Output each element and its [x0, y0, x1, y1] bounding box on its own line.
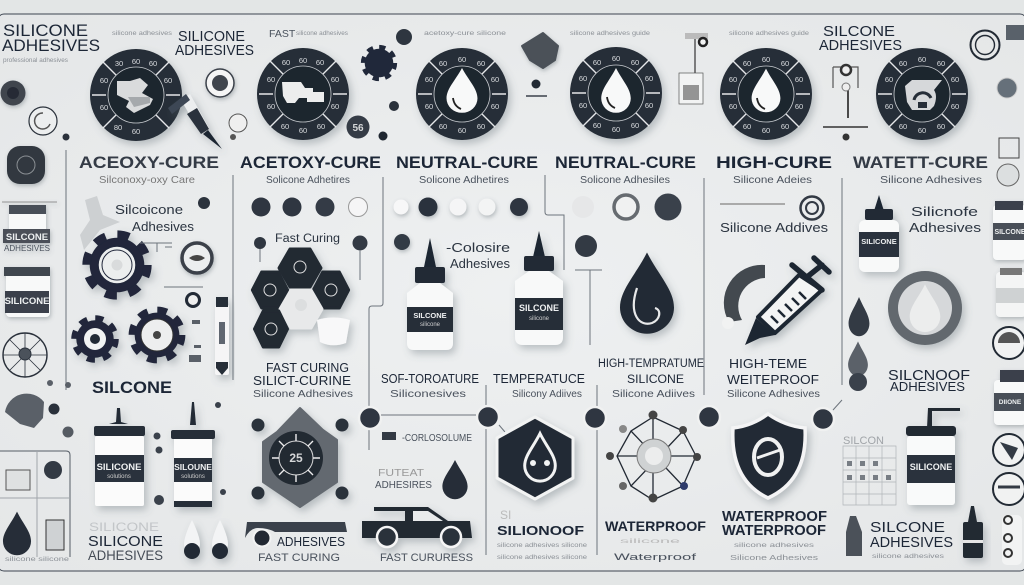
header: silicone adhesives right: SILCONE — [823, 23, 895, 40]
dial: neutral 2: 60 — [631, 121, 639, 130]
dial: high-cure — [720, 48, 812, 140]
icon: link pill — [1002, 515, 1022, 565]
dial: acetoxy 1: 60 — [100, 76, 108, 85]
column subtitles: Solicone Adhetires — [266, 174, 350, 186]
text: silcnoof adhesives: ADHESIVES — [890, 380, 965, 394]
dial: acetoxy 2: 60 — [317, 122, 325, 131]
text: waterproof 2 — [722, 509, 827, 562]
text: high temperature block: Silicone Adiives — [612, 388, 695, 400]
text: high temperature block: SILICONE — [627, 372, 684, 386]
header: fast: silicone adhesives guide — [570, 31, 651, 37]
bottle: big right: silicone — [529, 316, 550, 322]
text: high temperature block — [598, 358, 704, 400]
icon: tube — [168, 94, 222, 149]
dial: acetoxy 1: 80 — [114, 123, 122, 132]
dial: acetoxy 1: 60 — [100, 103, 108, 112]
dial: neutral 2: 60 — [593, 58, 601, 67]
text: silcnoof adhesives: SILCNOOF — [888, 367, 970, 384]
header: fast: silicone adhesives guide — [729, 31, 810, 37]
header: silicone adhesives second: SILICONE — [178, 28, 245, 45]
column subtitles: Silicone Adhesives — [880, 174, 982, 186]
header: silicone adhesives right: ADHESIVES — [819, 37, 902, 54]
text: silcnoof adhesives — [888, 367, 970, 394]
dial: neutral 2: 60 — [631, 58, 639, 67]
dial: high-cure: 60 — [795, 102, 803, 111]
small gear left — [74, 318, 116, 360]
jar right 2 — [996, 268, 1024, 317]
icon: target left — [29, 107, 57, 135]
dial: neutral 2: 60 — [579, 101, 587, 110]
jar right 3 — [994, 370, 1024, 425]
dial: water-cure: 60 — [885, 75, 893, 84]
icon: ring lens — [182, 243, 212, 273]
title: watett-cure: WATETT-CURE — [853, 153, 988, 172]
column titles — [79, 153, 988, 172]
dial: neutral 1: 60 — [491, 102, 499, 111]
text: fast curing block: FAST CURING — [266, 361, 349, 375]
dial: water-cure: 60 — [918, 126, 926, 135]
column subtitles: Silconoxy-oxy Care — [99, 174, 195, 186]
col 4: dots — [572, 194, 682, 270]
icon: dot top — [396, 29, 412, 45]
dial: acetoxy 1: 30 — [115, 59, 123, 68]
dial: acetoxy 2: 60 — [331, 75, 339, 84]
dial: acetoxy 2: 60 — [316, 58, 324, 67]
icon: syringe — [745, 258, 829, 345]
dial: neutral 2: 60 — [593, 121, 601, 130]
dial: high-cure: 60 — [743, 122, 751, 131]
dial: high-cure: 60 — [781, 122, 789, 131]
column subtitles — [99, 174, 982, 186]
dial: neutral 1 — [416, 48, 508, 140]
dial: water-cure: 60 — [885, 102, 893, 111]
header: silicone adhesives left: professional adhesives — [3, 58, 68, 64]
header: silicone adhesives second — [112, 28, 254, 59]
icon: two drops — [184, 520, 228, 559]
dial: neutral 1: 60 — [439, 59, 447, 68]
dial: water-cure: 60 — [899, 59, 907, 68]
silicone adhesive text col 1: Adhesives — [132, 219, 195, 234]
icon: dark dot and ring col 1 — [140, 197, 210, 306]
icon: badges — [359, 400, 842, 432]
dial: acetoxy 2: 60 — [299, 56, 307, 65]
text: soft temperature block — [381, 372, 585, 400]
jar 2: SILICONE — [5, 296, 49, 307]
dial: water-cure: 60 — [937, 122, 945, 131]
icon: rounded pad — [7, 146, 45, 184]
header: silicone adhesives left: SILICONE — [3, 21, 88, 40]
text: silionoof: silicone adhesives silicone — [497, 555, 588, 561]
text: silicnofe adhesives: Adhesives — [909, 220, 982, 235]
text: silicone adhesives bottom left: SILICONE — [89, 520, 159, 534]
dial: neutral 1: 60 — [477, 122, 485, 131]
column subtitles: Solicone Adhesiles — [580, 174, 670, 186]
dial: acetoxy 1: 60 — [132, 127, 140, 136]
text: waterproof 2: silicone adhesives — [734, 543, 814, 549]
text: waterproof 2: WATERPROOF — [722, 509, 827, 525]
jar right 1 — [993, 201, 1024, 260]
icon: lens — [206, 69, 234, 97]
column subtitles: Silicone Adeies — [733, 174, 812, 186]
text: high temperature block: HIGH-TEMPRATUME — [598, 358, 704, 370]
big gear — [87, 235, 147, 295]
text: silcone adhesives bottom right: silicone adhesives — [872, 554, 944, 560]
text: silicone adhesives bottom left — [88, 520, 163, 563]
text: fast curing mid: Fast Curing — [275, 233, 340, 245]
dial: water-cure: 60 — [899, 122, 907, 131]
icon: lower gem knob — [526, 80, 547, 96]
dial: neutral 2: 60 — [645, 101, 653, 110]
dial: acetoxy 1: 60 — [149, 59, 157, 68]
bar car: adhesives: ADHESIVES — [277, 534, 345, 549]
icon: crescent arc — [722, 265, 765, 329]
text: silicone adhesives bottom left: ADHESIVES — [88, 547, 163, 563]
icon: sphere — [5, 394, 74, 438]
col 3: dots — [394, 198, 528, 250]
dial: acetoxy 2: 60 — [331, 102, 339, 111]
icon: barcode tag — [679, 36, 708, 104]
bottle: water-cure top — [859, 195, 899, 272]
icon: large drop — [620, 252, 674, 334]
dial: acetoxy 1: 60 — [164, 76, 172, 85]
text: silicnofe adhesives — [909, 204, 982, 235]
dial: water-cure — [876, 48, 968, 140]
header: fast — [269, 28, 810, 40]
text: colosire adhesives: Adhesives — [450, 256, 510, 271]
icon: big ring drop — [888, 271, 962, 345]
icon: ring top right — [970, 30, 1000, 60]
right strip bottles — [993, 201, 1024, 565]
icon: balloon — [346, 116, 370, 138]
header: silicone adhesives left: ADHESIVES — [2, 36, 100, 55]
dial: high-cure: 60 — [762, 55, 770, 64]
dial: acetoxy 2: 60 — [267, 75, 275, 84]
text: corlosolume: FUTEAT — [378, 467, 425, 479]
icon: ring right 3 — [993, 473, 1024, 505]
jar 2 — [4, 267, 50, 317]
bottle: water-cure top: SILICONE — [861, 237, 897, 246]
text: silionoof: silicone adhesives silicone — [497, 543, 588, 549]
small top icons — [0, 25, 1024, 186]
icon: small dots — [62, 101, 399, 140]
text: waterproof 1 — [605, 518, 706, 562]
icon: left knob — [0, 80, 26, 106]
bottle: big right: SILCONE — [519, 303, 559, 313]
jar right 3: DIIONE — [999, 399, 1022, 406]
silicone adhesive text col 1 — [115, 202, 195, 234]
text: silicone addives: Silicone Addives — [720, 220, 829, 235]
text: waterproof 2: WATERPROOF — [722, 523, 826, 539]
icon: paper figure — [80, 196, 120, 250]
icon: truck — [362, 507, 472, 547]
icon: network — [606, 410, 701, 502]
icon: side drops — [848, 297, 869, 391]
jar 1: ADHESIVES — [4, 244, 50, 253]
dial: acetoxy 1: 60 — [132, 57, 140, 66]
dial: high-cure: 60 — [795, 75, 803, 84]
left cards: silicone silicone — [5, 557, 70, 563]
text: silcone adhesives bottom right: ADHESIVES — [870, 534, 953, 551]
col 2: dots — [252, 198, 368, 280]
text: waterproof 2: Silicone Adhesives — [730, 555, 819, 562]
header: fast: acetoxy-cure silicone — [424, 31, 507, 37]
icon: glue bottle — [963, 506, 983, 558]
header: silicone adhesives left — [2, 21, 100, 64]
text: corlosolume — [375, 432, 472, 491]
dial: high-cure: 60 — [743, 59, 751, 68]
text: fast curing block: Silicone Adhesives — [253, 388, 353, 400]
text: silcone adhesives bottom right — [870, 519, 953, 560]
dial: neutral 2: 60 — [645, 74, 653, 83]
text: soft temperature block: TEMPERATUCE — [493, 372, 585, 386]
icon: ring right 1 — [993, 327, 1024, 359]
header: fast: silicone adhesives — [296, 31, 348, 37]
bottle: silicone 1: solutions — [107, 474, 131, 480]
dial: neutral 1: 60 — [477, 59, 485, 68]
dial: high-cure: 60 — [762, 126, 770, 135]
dial: neutral 1: 60 — [439, 122, 447, 131]
dial: neutral 1: 60 — [491, 75, 499, 84]
icon: gear small — [363, 47, 395, 79]
dial: high-cure: 60 — [729, 75, 737, 84]
text: soft temperature block: SOF-TOROATURE — [381, 372, 479, 386]
title: acetoxy-cure: ACETOXY-CURE — [240, 153, 381, 172]
text: colosire adhesives — [446, 240, 510, 271]
text: corlosolume: -CORLOSOLUME — [402, 432, 472, 444]
jar 1 — [2, 202, 57, 253]
icon: knob right — [997, 25, 1024, 186]
col 1 small icons — [47, 320, 201, 388]
icon: shield — [733, 414, 805, 498]
bar car: adhesives: FAST CURING — [258, 552, 340, 564]
header: fast: FAST — [269, 28, 296, 40]
text: colosire adhesives: -Colosire — [446, 240, 510, 255]
jar 1: SILCONE — [6, 232, 48, 243]
title: neutral-cure 1: NEUTRAL-CURE — [396, 153, 538, 172]
bottle: silicone 1: SILICONE — [97, 462, 141, 473]
text: corlosolume: ADHESIRES — [375, 479, 432, 491]
icon: shield gem — [522, 33, 558, 68]
dial: water-cure: 60 — [937, 59, 945, 68]
title: aceoxy-cure: ACEOXY-CURE — [79, 153, 219, 172]
icon: gadget box — [6, 470, 30, 490]
text: high temp waterproof block: WEITEPROOF — [727, 373, 819, 387]
icon: ring right 2 — [993, 434, 1024, 466]
icon: grid keypad: SILCON — [843, 435, 884, 447]
text: fast cururess: FAST CURURESS — [380, 552, 473, 564]
bottle: big right — [515, 231, 563, 345]
bottle: big left: SILCONE — [413, 311, 447, 320]
icon: hub — [252, 408, 348, 507]
dial: acetoxy 2: 60 — [282, 58, 290, 67]
text: high temp waterproof block: HIGH-TEME — [729, 357, 807, 371]
text: silicone adhesives bottom left: SILICONE — [88, 533, 163, 550]
dial: neutral 1: 60 — [458, 55, 466, 64]
icon: drop card — [3, 512, 31, 555]
icon: mini bottle — [46, 520, 64, 550]
text: waterproof 1: WATERPROOF — [605, 518, 706, 534]
bottle: silicone 1 — [94, 408, 145, 506]
icon: pen — [215, 297, 229, 375]
icon: small ring — [229, 114, 247, 132]
icon: hex cluster — [252, 249, 350, 347]
title: high-cure: HIGH-CURE — [716, 153, 832, 172]
icon: hexagon drop — [497, 417, 573, 499]
icon: gears — [74, 235, 182, 360]
header: silicone adhesives second: silicone adhesives — [112, 31, 172, 37]
icon: grid keypad — [843, 435, 896, 505]
dial: neutral 2: 60 — [612, 54, 620, 63]
icon: gadget — [823, 65, 868, 140]
icon: hub: 25 — [289, 451, 303, 465]
silicone adhesive text col 1: Silcoicone — [115, 202, 183, 217]
dial: acetoxy 2: 60 — [299, 126, 307, 135]
icon: balloon: 56 — [352, 123, 364, 134]
dots between bottles — [154, 402, 226, 505]
icon: knob card — [44, 461, 62, 479]
bottle: silicone 2: SILOUNE — [174, 462, 212, 472]
dial: high-cure: 60 — [781, 59, 789, 68]
silicone title col 1: SILCONE — [92, 378, 172, 397]
dial: neutral 1: 60 — [425, 75, 433, 84]
dial: acetoxy 1 — [90, 49, 182, 141]
text: high temp waterproof block: Silicone Adhesives — [727, 388, 820, 400]
icon: dial wheel — [3, 333, 47, 377]
bottle: big left — [407, 238, 453, 350]
text: fast curing block — [253, 361, 353, 400]
header: silicone adhesives right — [819, 23, 902, 54]
bottle: silicone 2 — [171, 402, 215, 507]
text: silicnofe adhesives: Silicnofe — [911, 204, 978, 219]
dial: water-cure: 60 — [951, 102, 959, 111]
icon: bottle bottom right: SILICONE — [910, 462, 952, 472]
small gear right — [132, 310, 182, 360]
dial: acetoxy 2: 60 — [281, 122, 289, 131]
icon: top gadget and ring — [720, 196, 824, 220]
bar car: adhesives — [245, 522, 347, 564]
text: silionoof: SI — [500, 508, 511, 522]
title: neutral-cure 2: NEUTRAL-CURE — [555, 153, 696, 172]
text: silcone adhesives bottom right: SILCONE — [870, 519, 945, 536]
bottle: big left: silicone — [420, 322, 441, 328]
dial: neutral 1: 60 — [458, 126, 466, 135]
left strip jars — [2, 202, 74, 438]
dial: acetoxy 2 — [257, 48, 349, 140]
text: silionoof — [497, 508, 588, 561]
dial: high-cure: 60 — [729, 102, 737, 111]
text: soft temperature block: Siliconesives — [390, 388, 466, 400]
column subtitles: Solicone Adhetires — [419, 174, 509, 186]
dial: water-cure: 60 — [918, 55, 926, 64]
icon: small bottle left of text — [846, 516, 862, 556]
dial: acetoxy 2: 60 — [267, 102, 275, 111]
text: high temp waterproof block — [727, 357, 820, 400]
text: fast curing block: SILICT-CURINE — [253, 374, 351, 388]
text: silionoof: SILIONOOF — [497, 524, 584, 538]
text: soft temperature block: Silicony Adiives — [512, 388, 582, 400]
text: waterproof 1: Waterproof — [614, 552, 697, 562]
dial: neutral 2: 60 — [612, 125, 620, 134]
icon: bottle bottom right — [906, 408, 960, 505]
text: waterproof 1: silicone — [620, 539, 682, 545]
dial: neutral 2 — [570, 47, 662, 139]
dial: neutral 1: 60 — [425, 102, 433, 111]
bottle: silicone 2: solutions — [181, 474, 205, 480]
dial: water-cure: 60 — [951, 75, 959, 84]
icon: drop small — [442, 460, 468, 499]
left cards — [0, 451, 70, 563]
dial: neutral 2: 60 — [579, 74, 587, 83]
header: silicone adhesives second: ADHESIVES — [175, 42, 254, 59]
